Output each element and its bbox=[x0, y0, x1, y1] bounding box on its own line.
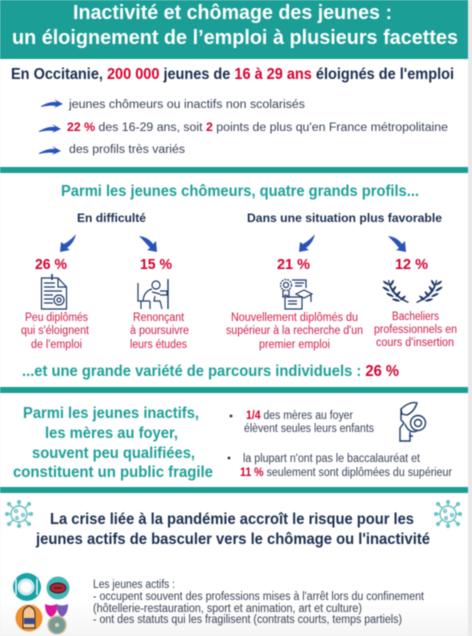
bullet: mères seules: élèvent seules leurs enfants bbox=[244, 423, 374, 435]
profile text: peu diplômés: qui s'éloignent bbox=[21, 325, 90, 337]
value: 15 %: 15 % bbox=[140, 256, 172, 273]
crisis heading: jeunes actifs de basculer vers le chômage ou l'inactivité bbox=[35, 531, 430, 548]
section heading: Parmi les jeunes chômeurs, quatre grands profils... bbox=[61, 183, 419, 200]
profile text: bacheliers: cours d'insertion bbox=[376, 337, 454, 349]
inactifs heading bbox=[13, 405, 213, 481]
profile text: bacheliers: professionnels en bbox=[374, 324, 457, 336]
icon: document bbox=[42, 274, 66, 309]
panel: jeunes inactifs bbox=[13, 403, 452, 481]
crisis heading: La crise liée à la pandémie accroît le risque pour les bbox=[50, 511, 414, 528]
profile text: renonçant bbox=[130, 312, 189, 351]
icon: restaurant bbox=[13, 573, 41, 601]
body text: - ont des statuts qui les fragilisent (contrats courts, temps partiels) bbox=[93, 614, 402, 626]
arrow: 21 bbox=[299, 234, 315, 252]
body text bbox=[93, 579, 425, 626]
profile text: renonçant: Renonçant bbox=[133, 312, 185, 324]
bullet: mères seules: 1/4 des mères au foyer bbox=[246, 410, 353, 422]
icon: discouraged student bbox=[138, 279, 168, 309]
profile text: peu diplômés bbox=[21, 312, 90, 351]
icon: virus left bbox=[7, 502, 31, 526]
arrow 2 bbox=[39, 124, 61, 133]
bullet: diplômes: la plupart n'ont pas le baccalauréat et bbox=[243, 453, 421, 465]
body text: (hôtellerie-restauration, sport et animation, art et culture) bbox=[93, 603, 362, 615]
arrow: 26 bbox=[60, 234, 76, 252]
profile text: nouvellement diplômés: supérieur à la recherche d'un bbox=[226, 325, 363, 337]
bullet 1: jeunes chômeurs ou inactifs non scolarisés bbox=[68, 99, 305, 111]
profile text: peu diplômés: Peu diplômés bbox=[25, 312, 88, 324]
bullet 3: des profils très variés bbox=[69, 144, 185, 156]
inactifs heading: les mères au foyer, bbox=[45, 425, 178, 442]
icon: laurels bbox=[382, 279, 443, 303]
subtitle: En Occitanie, 200 000 jeunes de 16 à 29 ans éloignés de l'emploi bbox=[11, 66, 454, 83]
body text: - occupent souvent des professions mises à l'arrêt lors du confinement bbox=[93, 591, 425, 603]
icon: virus right bbox=[436, 502, 460, 526]
value: 21 %: 21 % bbox=[277, 256, 310, 273]
bullet: diplômes bbox=[228, 453, 452, 479]
bullet 2: 22 % des 16-29 ans, soit 2 points de plus qu'en France métropolitaine bbox=[67, 122, 448, 134]
profile text: nouvellement diplômés: Nouvellement diplômés du bbox=[231, 312, 358, 324]
arrow: 15 bbox=[139, 236, 157, 252]
bullet: diplômes: 11 % seulement sont diplômées du supérieur bbox=[240, 467, 452, 479]
arrow 1 bbox=[41, 99, 63, 108]
profile text: bacheliers bbox=[374, 311, 457, 349]
value: 12 %: 12 % bbox=[395, 256, 428, 273]
profile text: peu diplômés: de l'emploi bbox=[31, 339, 82, 351]
inactifs heading: souvent peu qualifiées, bbox=[32, 445, 195, 462]
icon: animation bbox=[16, 604, 42, 632]
arrow: 12 bbox=[388, 236, 406, 252]
group label: en difficulté: En difficulté bbox=[77, 211, 146, 225]
icon: diploma bbox=[280, 280, 312, 309]
panel: Occitanie summary bbox=[11, 66, 454, 156]
title: un éloignement de l’emploi à plusieurs facettes bbox=[12, 26, 458, 49]
panel: crise bbox=[7, 502, 460, 634]
panel: jeunes chômeurs bbox=[21, 183, 457, 380]
inactifs heading: constituent un public fragile bbox=[13, 464, 213, 481]
icon: mother and child bbox=[400, 403, 426, 441]
inactifs heading: Parmi les jeunes inactifs, bbox=[23, 405, 199, 422]
body text: Les jeunes actifs : bbox=[93, 579, 175, 591]
profile text: bacheliers: Bacheliers bbox=[392, 311, 439, 323]
closing line: ...et une grande variété de parcours individuels : 26 % bbox=[22, 363, 399, 380]
profile text: nouvellement diplômés: premier emploi bbox=[259, 339, 330, 351]
profile text: renonçant: leurs études bbox=[130, 339, 187, 351]
bullet: mères seules bbox=[230, 410, 374, 435]
panel: header bbox=[0, 0, 468, 59]
arrow 3 bbox=[39, 146, 61, 155]
value: 26 %: 26 % bbox=[35, 256, 67, 273]
profile text: renonçant: à poursuivre bbox=[130, 325, 189, 337]
profile text: nouvellement diplômés bbox=[226, 312, 363, 351]
crisis heading bbox=[35, 511, 430, 548]
title bbox=[12, 1, 458, 49]
icon: sport bbox=[46, 576, 70, 600]
title: Inactivité et chômage des jeunes : bbox=[73, 1, 392, 24]
group label: situation favorable: Dans une situation plus favorable bbox=[247, 211, 442, 225]
icon: arts and culture bbox=[45, 604, 68, 634]
